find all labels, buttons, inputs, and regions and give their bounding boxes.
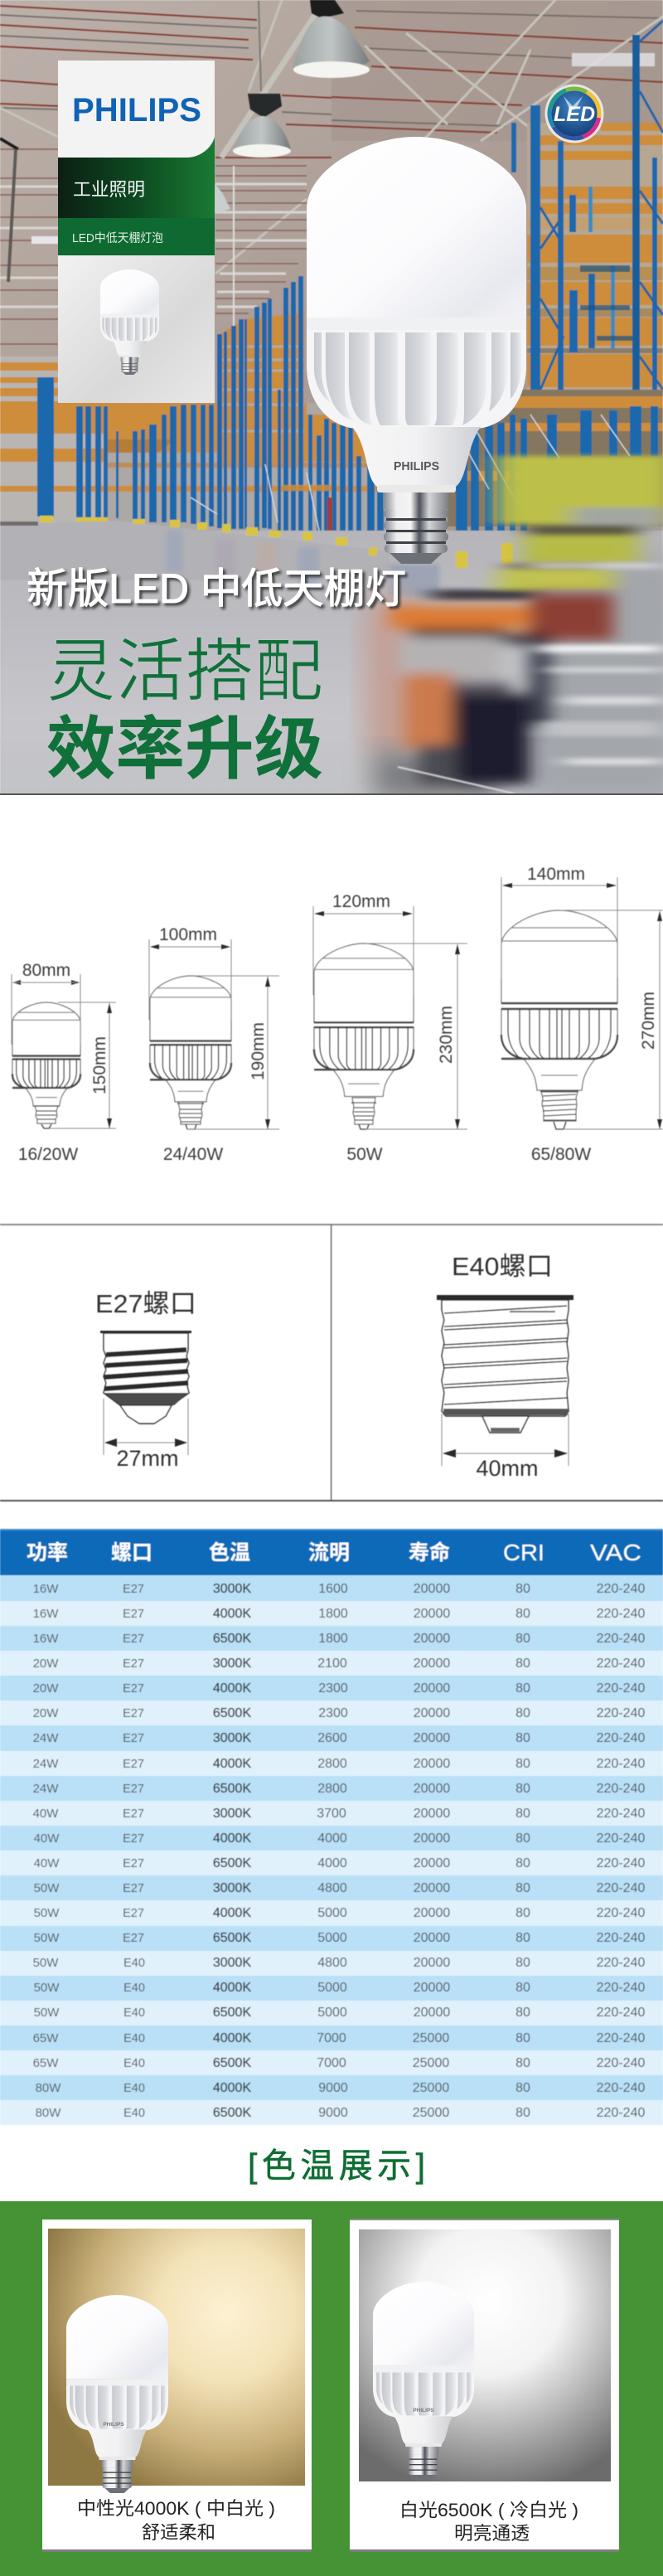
card: 6500K cool white light bbox=[350, 2219, 619, 2552]
row 11: 20000 bbox=[414, 1831, 450, 1846]
blurred forklift bbox=[365, 597, 414, 754]
right rack area bbox=[527, 123, 663, 405]
row 5: 20000 bbox=[414, 1681, 450, 1696]
row 16: 220-240 bbox=[597, 1956, 645, 1970]
section heading: colour temperature: [色温展示] bbox=[248, 2147, 425, 2185]
row 7: 220-240 bbox=[597, 1731, 645, 1745]
row 22: 220-240 bbox=[597, 2106, 645, 2120]
row 5 bbox=[0, 1676, 663, 1700]
row 3: 6500K bbox=[213, 1632, 251, 1646]
table header: 寿命 bbox=[409, 1540, 450, 1565]
row 18: 220-240 bbox=[597, 2006, 645, 2020]
row 18: E40 bbox=[123, 2006, 145, 2020]
bulb 16/20W outline: 80mm bbox=[22, 961, 70, 980]
row 9: 20000 bbox=[414, 1782, 450, 1796]
left rack and wall bbox=[0, 357, 108, 526]
row 5: E27 bbox=[123, 1682, 144, 1696]
dimensions section bbox=[12, 865, 663, 1164]
card: 4000K neutral light: 中性光4000K ( 中白光 ) bbox=[77, 2498, 275, 2519]
row 20: 7000 bbox=[317, 2056, 346, 2070]
row 22: 25000 bbox=[413, 2106, 449, 2120]
row 6: 20000 bbox=[414, 1706, 450, 1720]
table header: 色温 bbox=[209, 1541, 250, 1565]
row 20: 80 bbox=[515, 2056, 530, 2070]
row 4: 2100 bbox=[317, 1657, 347, 1671]
bulb 50W outline: 50W bbox=[346, 1145, 383, 1164]
row 6: 2300 bbox=[318, 1706, 348, 1720]
row 1: 16W bbox=[33, 1582, 59, 1596]
row 11: 80 bbox=[515, 1831, 530, 1846]
row 12: 220-240 bbox=[597, 1856, 645, 1870]
row 9: 220-240 bbox=[597, 1782, 645, 1796]
row 15: 5000 bbox=[317, 1931, 347, 1945]
row 17: 50W bbox=[34, 1981, 60, 1995]
row 8: E27 bbox=[123, 1758, 144, 1771]
row 18: 20000 bbox=[414, 2006, 450, 2020]
row 17: 80 bbox=[515, 1981, 530, 1995]
row 2 bbox=[0, 1601, 663, 1626]
row 2: 4000K bbox=[213, 1607, 251, 1621]
floor bbox=[0, 531, 663, 796]
row 7: 80 bbox=[515, 1731, 530, 1745]
row 3 bbox=[0, 1626, 663, 1651]
row 21: 25000 bbox=[413, 2081, 449, 2095]
row 10: E27 bbox=[123, 1807, 144, 1821]
row 1: 220-240 bbox=[597, 1582, 645, 1596]
table header: VAC bbox=[590, 1540, 641, 1565]
row 17: E40 bbox=[123, 1982, 145, 1995]
row 7: 3000K bbox=[213, 1731, 251, 1745]
row 8: 2800 bbox=[317, 1757, 347, 1771]
row 10: 3700 bbox=[317, 1807, 346, 1821]
row 13: 3000K bbox=[213, 1881, 251, 1895]
bulb 50W outline: 230mm bbox=[437, 1006, 456, 1064]
row 20: 25000 bbox=[413, 2056, 449, 2070]
card: 6500K cool white light: PHILIPS bbox=[413, 2408, 434, 2413]
bulb 24/40W outline: 24/40W bbox=[163, 1145, 223, 1164]
table header: 流明 bbox=[308, 1541, 350, 1565]
row 9 bbox=[0, 1776, 663, 1801]
bulb 65/80W outline: 270mm bbox=[639, 992, 658, 1050]
bulb 24/40W outline bbox=[149, 925, 279, 1164]
hero banner bbox=[0, 0, 663, 804]
row 17: 4000K bbox=[213, 1981, 251, 1995]
hero slogan line 1: 灵活搭配 bbox=[46, 633, 323, 710]
row 11: E27 bbox=[123, 1832, 144, 1846]
row 19: 4000K bbox=[213, 2031, 251, 2045]
row 1: 1600 bbox=[318, 1582, 348, 1596]
row 21: 220-240 bbox=[597, 2081, 645, 2095]
row 9: 6500K bbox=[213, 1782, 251, 1796]
row 14: 5000 bbox=[317, 1906, 347, 1920]
hero headline: 新版LED 中低天棚灯 bbox=[27, 565, 406, 612]
row 14: E27 bbox=[123, 1907, 144, 1920]
table header bbox=[0, 1529, 663, 1575]
pendant lamp 1 bbox=[293, 0, 370, 78]
row 11: 4000K bbox=[213, 1831, 251, 1846]
row 5: 220-240 bbox=[597, 1681, 645, 1696]
row 8: 220-240 bbox=[597, 1757, 645, 1771]
row 13 bbox=[0, 1875, 663, 1900]
row 7: 2600 bbox=[317, 1731, 347, 1745]
row 6: 220-240 bbox=[597, 1706, 645, 1720]
LED badge bbox=[545, 85, 603, 143]
row 2: 220-240 bbox=[597, 1607, 645, 1621]
row 18: 50W bbox=[34, 2006, 60, 2020]
row 20: 220-240 bbox=[597, 2056, 645, 2070]
row 5: 20W bbox=[33, 1681, 59, 1696]
row 19: 65W bbox=[33, 2031, 59, 2045]
row 13: 50W bbox=[34, 1881, 60, 1895]
LED badge: LED bbox=[554, 103, 595, 126]
row 3: 220-240 bbox=[597, 1632, 645, 1646]
row 18: 6500K bbox=[213, 2006, 251, 2020]
row 1: E27 bbox=[123, 1583, 144, 1596]
row 12 bbox=[0, 1851, 663, 1875]
row 16: 50W bbox=[33, 1956, 59, 1970]
row 5: 2300 bbox=[318, 1681, 348, 1696]
E27 socket: 27mm bbox=[116, 1446, 179, 1471]
bulb 24/40W outline: 190mm bbox=[249, 1022, 268, 1080]
row 1: 3000K bbox=[213, 1582, 251, 1596]
row 3: 16W bbox=[33, 1632, 59, 1646]
row 21: E40 bbox=[123, 2082, 145, 2095]
row 1: 20000 bbox=[414, 1582, 450, 1596]
row 10 bbox=[0, 1801, 663, 1826]
row 19: 220-240 bbox=[597, 2031, 645, 2045]
row 22: E40 bbox=[123, 2107, 145, 2120]
pendant lamp 3 bbox=[215, 184, 230, 214]
row 11: 220-240 bbox=[597, 1831, 645, 1846]
Philips logo: PHILIPS bbox=[72, 92, 201, 129]
row 3: E27 bbox=[123, 1632, 144, 1646]
row 5: 80 bbox=[515, 1681, 530, 1696]
row 14: 4000K bbox=[213, 1906, 251, 1920]
row 2: 80 bbox=[515, 1607, 530, 1621]
row 4 bbox=[0, 1651, 663, 1676]
E27 socket bbox=[95, 1289, 196, 1471]
row 18: 80 bbox=[515, 2006, 530, 2020]
row 10: 40W bbox=[33, 1807, 59, 1821]
card: 6500K cool white light: 白光6500K ( 冷白光 ) bbox=[399, 2500, 578, 2520]
row 2: E27 bbox=[123, 1608, 144, 1621]
row 20: E40 bbox=[123, 2057, 145, 2070]
bulb 16/20W outline bbox=[12, 961, 116, 1164]
row 10: 80 bbox=[515, 1807, 530, 1821]
row 15: 80 bbox=[515, 1931, 530, 1945]
E27 socket: E27螺口 bbox=[95, 1289, 196, 1318]
row 11: 40W bbox=[34, 1831, 60, 1846]
row 4: 20W bbox=[33, 1657, 59, 1671]
row 19: 80 bbox=[515, 2031, 530, 2045]
bulb 65/80W outline: 65/80W bbox=[531, 1145, 591, 1164]
card subtitle: LED中低天棚灯泡 bbox=[72, 231, 163, 245]
row 19 bbox=[0, 2025, 663, 2050]
row 7: E27 bbox=[123, 1732, 144, 1745]
hero warehouse photo background bbox=[0, 0, 663, 804]
row 7 bbox=[0, 1725, 663, 1751]
row 7: 24W bbox=[33, 1731, 59, 1745]
row 2: 20000 bbox=[414, 1607, 450, 1621]
row 14: 20000 bbox=[414, 1906, 450, 1920]
row 13: 4800 bbox=[317, 1881, 347, 1895]
row 21: 80W bbox=[36, 2081, 61, 2095]
row 15: 6500K bbox=[213, 1931, 251, 1945]
hero slogan line 2: 效率升级 bbox=[46, 711, 323, 788]
row 4: 220-240 bbox=[597, 1657, 645, 1671]
table header: CRI bbox=[503, 1540, 544, 1565]
row 2: 16W bbox=[33, 1607, 59, 1621]
card: 4000K neutral light: PHILIPS bbox=[103, 2422, 124, 2428]
row 17: 220-240 bbox=[597, 1981, 645, 1995]
row 19: 7000 bbox=[317, 2031, 346, 2045]
row 11 bbox=[0, 1826, 663, 1851]
row 12: 20000 bbox=[414, 1856, 450, 1870]
card: 4000K neutral light bbox=[42, 2219, 312, 2552]
row 12: 80 bbox=[515, 1856, 530, 1870]
card mini bulb bbox=[100, 269, 159, 375]
row 4: 20000 bbox=[414, 1657, 450, 1671]
row 22 bbox=[0, 2100, 663, 2125]
row 14: 50W bbox=[34, 1906, 60, 1920]
row 14: 220-240 bbox=[597, 1906, 645, 1920]
bulb 50W outline bbox=[313, 892, 467, 1164]
row 18: 5000 bbox=[317, 2006, 347, 2020]
pendant lamp 2 bbox=[233, 1, 291, 158]
row 15: E27 bbox=[123, 1932, 144, 1945]
row 15: 220-240 bbox=[597, 1931, 645, 1945]
row 22: 80 bbox=[515, 2106, 530, 2120]
row 12: E27 bbox=[123, 1857, 144, 1870]
row 9: 80 bbox=[515, 1782, 530, 1796]
row 6 bbox=[0, 1700, 663, 1725]
row 8: 20000 bbox=[414, 1757, 450, 1771]
row 17 bbox=[0, 1976, 663, 2001]
row 19: 25000 bbox=[413, 2031, 449, 2045]
row 16: 20000 bbox=[414, 1956, 450, 1970]
row 21: 9000 bbox=[318, 2081, 348, 2095]
row 13: 80 bbox=[515, 1881, 530, 1895]
row 10: 3000K bbox=[213, 1807, 251, 1821]
row 6: 6500K bbox=[213, 1706, 251, 1720]
row 15 bbox=[0, 1926, 663, 1951]
bulb 16/20W outline: 16/20W bbox=[18, 1145, 78, 1164]
row 15: 20000 bbox=[414, 1931, 450, 1945]
row 17: 5000 bbox=[317, 1981, 347, 1995]
row 14: 80 bbox=[515, 1906, 530, 1920]
row 18 bbox=[0, 2001, 663, 2025]
row 16 bbox=[0, 1951, 663, 1976]
hero bulb photo bbox=[307, 137, 526, 564]
row 16: 80 bbox=[515, 1956, 530, 1970]
row 17: 20000 bbox=[414, 1981, 450, 1995]
row 9: E27 bbox=[123, 1783, 144, 1796]
row 9: 24W bbox=[33, 1782, 59, 1796]
row 19: E40 bbox=[123, 2032, 145, 2045]
row 6: 20W bbox=[33, 1706, 59, 1720]
colour temperature panel bbox=[0, 2201, 663, 2576]
row 15: 50W bbox=[34, 1931, 60, 1945]
card: 6500K cool white light: 明亮通透 bbox=[454, 2523, 530, 2544]
row 20 bbox=[0, 2050, 663, 2075]
row 1: 80 bbox=[515, 1582, 530, 1596]
row 8: 80 bbox=[515, 1757, 530, 1771]
row 12: 40W bbox=[34, 1856, 60, 1870]
row 4: 3000K bbox=[213, 1657, 251, 1671]
row 22: 9000 bbox=[318, 2106, 348, 2120]
E40 socket bbox=[437, 1252, 573, 1481]
row 16: E40 bbox=[123, 1957, 145, 1970]
row 16: 3000K bbox=[213, 1956, 251, 1970]
row 8: 24W bbox=[33, 1757, 59, 1771]
socket comparison section bbox=[0, 1224, 663, 1501]
bulb 65/80W outline: 140mm bbox=[527, 865, 585, 884]
table header: 螺口 bbox=[111, 1541, 152, 1565]
row 8: 4000K bbox=[213, 1757, 251, 1771]
row 9: 2800 bbox=[317, 1782, 347, 1796]
row 6: E27 bbox=[123, 1707, 144, 1720]
hero bulb photo: PHILIPS bbox=[394, 460, 439, 473]
row 1 bbox=[0, 1575, 663, 1601]
row 2: 1800 bbox=[318, 1607, 348, 1621]
row 11: 4000 bbox=[317, 1831, 347, 1846]
row 7: 20000 bbox=[414, 1731, 450, 1745]
table header: 功率 bbox=[27, 1541, 68, 1565]
bulb 65/80W outline bbox=[501, 865, 663, 1164]
row 4: 80 bbox=[515, 1657, 530, 1671]
card green panel bbox=[58, 137, 215, 218]
row 12: 4000 bbox=[317, 1856, 347, 1870]
row 13: 20000 bbox=[414, 1881, 450, 1895]
row 21: 80 bbox=[515, 2081, 530, 2095]
row 21: 4000K bbox=[213, 2081, 251, 2095]
row 3: 80 bbox=[515, 1632, 530, 1646]
row 5: 4000K bbox=[213, 1681, 251, 1696]
row 20: 65W bbox=[33, 2056, 59, 2070]
product packaging card bbox=[58, 61, 215, 403]
row 4: E27 bbox=[123, 1657, 144, 1671]
E40 socket: E40螺口 bbox=[452, 1252, 553, 1281]
E40 socket: 40mm bbox=[476, 1456, 539, 1481]
row 14 bbox=[0, 1900, 663, 1926]
bulb 50W outline: 120mm bbox=[332, 892, 390, 911]
rack behind forklift bbox=[448, 390, 663, 526]
card: 4000K neutral light: 舒适柔和 bbox=[142, 2522, 215, 2543]
row 16: 4800 bbox=[317, 1956, 347, 1970]
row 6: 80 bbox=[515, 1706, 530, 1720]
row 22: 6500K bbox=[213, 2106, 251, 2120]
row 22: 80W bbox=[36, 2106, 61, 2120]
row 20: 6500K bbox=[213, 2056, 251, 2070]
row 13: E27 bbox=[123, 1882, 144, 1895]
row 10: 220-240 bbox=[597, 1807, 645, 1821]
bulb 16/20W outline: 150mm bbox=[90, 1036, 109, 1094]
row 13: 220-240 bbox=[597, 1881, 645, 1895]
row 21 bbox=[0, 2075, 663, 2100]
row 12: 6500K bbox=[213, 1856, 251, 1870]
row 8 bbox=[0, 1751, 663, 1776]
card title: 工业照明 bbox=[73, 179, 145, 200]
row 3: 1800 bbox=[318, 1632, 348, 1646]
specification table bbox=[0, 1529, 663, 2125]
row 10: 20000 bbox=[414, 1807, 450, 1821]
bulb 24/40W outline: 100mm bbox=[159, 925, 217, 944]
row 3: 20000 bbox=[414, 1632, 450, 1646]
